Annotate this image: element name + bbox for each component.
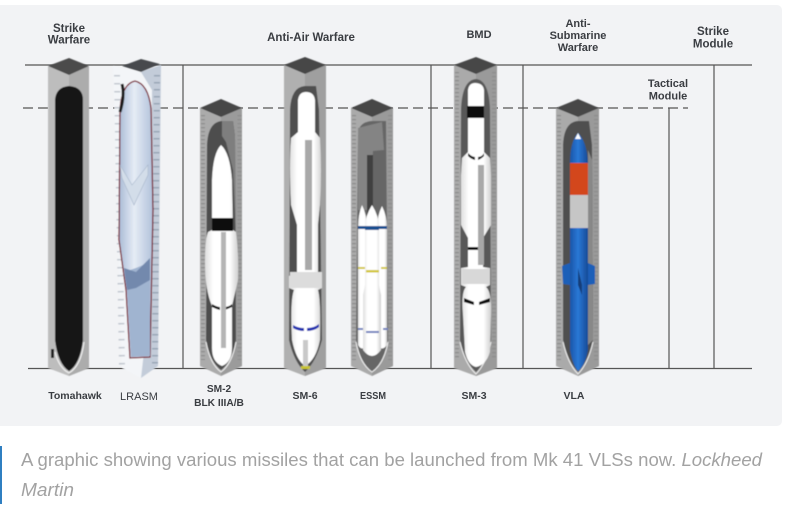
missile: SM-6 <box>289 92 322 366</box>
canister: SM-2 <box>200 99 242 376</box>
heading: Anti-Submarine Warfare: Anti- <box>565 18 591 30</box>
canister: LRASM <box>113 59 161 378</box>
missile: LRASM <box>119 81 153 358</box>
heading: Anti-Air Warfare: Anti-Air Warfare <box>267 32 355 44</box>
canister: ESSM <box>351 99 393 376</box>
caption: A graphic showing various missiles that can be launched from Mk 41 VLSs now. Lockheed <box>21 450 763 470</box>
missile: ESSM <box>358 205 367 348</box>
caption accent bar <box>0 446 2 504</box>
label: LRASM: LRASM <box>120 391 158 403</box>
heading: BMD: BMD <box>466 29 492 41</box>
label: SM-3: SM-3 <box>461 390 487 402</box>
missile: SM-3 <box>461 83 491 367</box>
caption <box>21 450 763 500</box>
label: Tomahawk: Tomahawk <box>48 390 102 402</box>
heading: Tactical Module: Tactical <box>648 78 688 90</box>
canister: VLA <box>556 99 599 376</box>
missile: Tomahawk <box>55 86 83 371</box>
canister: Tomahawk <box>48 58 89 376</box>
label: ESSM: ESSM <box>360 390 386 402</box>
label: VLA: VLA <box>564 390 585 402</box>
canister: SM-6 <box>284 57 326 376</box>
heading: Anti-Submarine Warfare: Warfare <box>558 42 598 54</box>
canister: SM-3 <box>454 57 497 376</box>
caption: Martin <box>21 480 74 500</box>
heading: Strike Warfare: Strike <box>53 23 85 35</box>
heading: Tactical Module: Module <box>649 90 687 102</box>
heading: Strike Module: Strike <box>697 26 729 38</box>
missile: SM-2 <box>205 145 238 366</box>
missile: VLA <box>562 133 595 371</box>
label: SM-2 BLK IIIA/B: SM-2 <box>207 384 232 395</box>
module lines <box>23 65 752 368</box>
heading: Strike Module: Module <box>693 38 733 50</box>
heading: Anti-Submarine Warfare: Submarine <box>550 30 606 42</box>
label: SM-6: SM-6 <box>292 390 318 402</box>
heading: Strike Warfare: Warfare <box>48 34 90 46</box>
label: SM-2 BLK IIIA/B: BLK IIIA/B <box>194 398 244 409</box>
